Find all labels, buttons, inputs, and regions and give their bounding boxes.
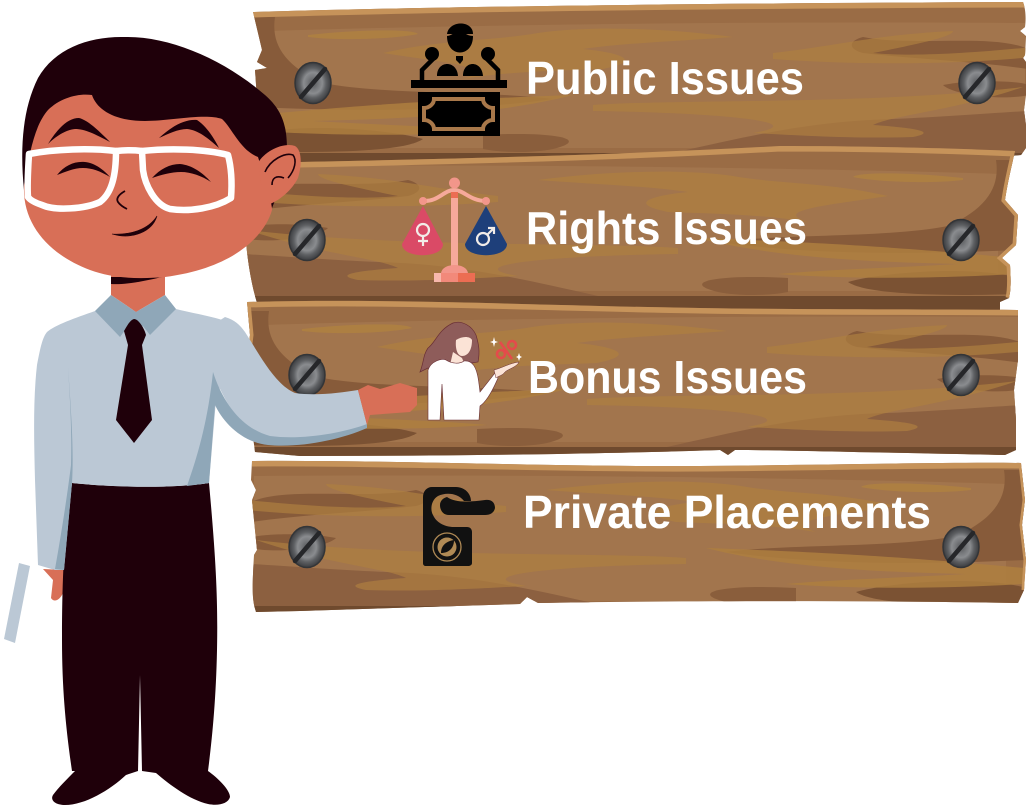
heading: Bonus Issues: Bonus Issues: [528, 351, 807, 403]
screws on planks: [289, 62, 995, 568]
icon: podium speaker: [411, 24, 507, 136]
illustration: man in glasses presenting: [4, 37, 417, 805]
panel: wooden plank 2: [238, 140, 1023, 316]
man: face: [24, 95, 272, 278]
man: extended hand: [358, 383, 417, 425]
man: sleeve crease: [55, 367, 73, 570]
man: paper held in hand: [4, 563, 30, 643]
man: trousers: [52, 483, 230, 805]
man: eyebrows: [48, 118, 219, 148]
man: smile: [112, 216, 157, 236]
icon: woman holding percent sign: [420, 322, 522, 420]
man: extended arm: [205, 317, 367, 439]
heading: Private Placements: Private Placements: [523, 486, 931, 538]
man: nose: [117, 191, 127, 209]
man: tie: [116, 319, 152, 443]
man: hair back: [22, 37, 287, 208]
heading: Public Issues: Public Issues: [526, 52, 804, 104]
man: glasses: [28, 149, 232, 210]
panel: wooden plank 4: [251, 460, 1026, 612]
panel: wooden plank 1: [245, 0, 1028, 173]
man: shirt shadow: [187, 372, 367, 486]
man: shirt torso and left sleeve: [34, 309, 240, 570]
icon: gender equality scale: [402, 178, 507, 282]
heading: Rights Issues: Rights Issues: [526, 202, 807, 254]
icon: door hanger: [423, 487, 495, 566]
man: collar: [95, 295, 176, 337]
man: closed eyes: [57, 162, 211, 182]
man: neck: [111, 270, 165, 312]
man: lower hand: [43, 569, 64, 600]
man: ear: [258, 145, 301, 204]
panel: wooden plank 3: [247, 300, 1018, 456]
